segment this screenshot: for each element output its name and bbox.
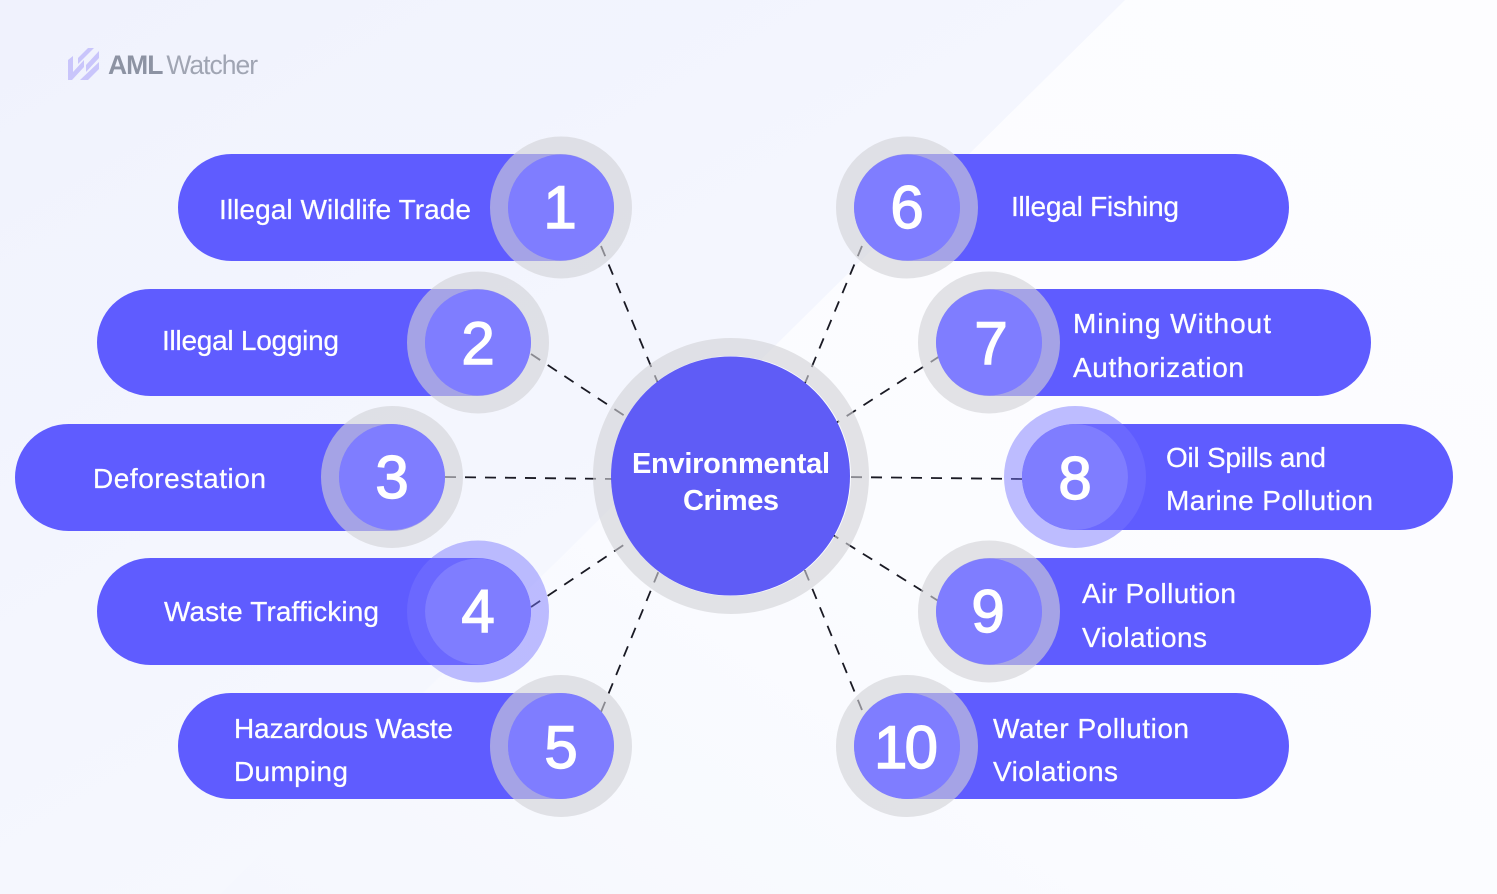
item 10: Water Pollution Violations: Water Pollution (993, 713, 1189, 744)
item 8: Oil Spills and Marine Pollution: Marine Pollution (1166, 485, 1373, 516)
item 2: Illegal Logging: Illegal Logging (162, 325, 339, 356)
item 6: Illegal Fishing (845, 146, 1289, 270)
item 8: Oil Spills and Marine Pollution (1013, 415, 1453, 539)
item 6: Illegal Fishing: 6 (890, 174, 924, 241)
item 10: Water Pollution Violations (845, 684, 1289, 808)
item 8: Oil Spills and Marine Pollution: Oil Spills and (1166, 442, 1326, 473)
item 10: Water Pollution Violations: 10 (874, 714, 938, 781)
item 7: Mining Without Authorization: Authorization (1073, 352, 1244, 383)
item 1: Illegal Wildlife Trade: 1 (543, 174, 577, 241)
central hub: Environmental Crimes: Environmental (632, 448, 830, 480)
item 3: Deforestation: 3 (375, 444, 409, 511)
item 4: Waste Trafficking: Waste Trafficking (164, 596, 379, 627)
item 9: Air Pollution Violations: 9 (971, 578, 1005, 645)
icon: logo mark (68, 48, 99, 80)
item 5: Hazardous Waste Dumping: Dumping (234, 756, 348, 787)
item 7: Mining Without Authorization: Mining Without (1073, 308, 1271, 339)
item 7: Mining Without Authorization (927, 280, 1371, 404)
item 1: Illegal Wildlife Trade: Illegal Wildlife Trade (219, 194, 471, 225)
item 7: Mining Without Authorization: 7 (974, 310, 1008, 377)
item 9: Air Pollution Violations: Violations (1082, 622, 1207, 653)
item 9: Air Pollution Violations (927, 550, 1371, 674)
item 3: Deforestation (15, 415, 454, 539)
item 2: Illegal Logging: 2 (461, 310, 495, 377)
item 10: Water Pollution Violations: Violations (993, 756, 1118, 787)
logo wordmark: AMLWatcher (108, 50, 258, 80)
item 6: Illegal Fishing: Illegal Fishing (1011, 191, 1179, 222)
item 5: Hazardous Waste Dumping: 5 (544, 714, 578, 781)
central hub: Environmental Crimes (602, 347, 860, 605)
item 1: Illegal Wildlife Trade (178, 146, 623, 270)
logo (68, 48, 258, 80)
item 2: Illegal Logging (97, 280, 540, 404)
item 9: Air Pollution Violations: Air Pollution (1082, 578, 1236, 609)
connector lines (445, 246, 1022, 712)
item 4: Waste Trafficking: 4 (461, 578, 495, 645)
item 5: Hazardous Waste Dumping: Hazardous Waste (234, 713, 453, 744)
central hub: Environmental Crimes: Crimes (683, 485, 779, 517)
item 3: Deforestation: Deforestation (93, 463, 266, 494)
item 5: Hazardous Waste Dumping (178, 684, 623, 808)
item 8: Oil Spills and Marine Pollution: 8 (1058, 445, 1092, 512)
item 4: Waste Trafficking (97, 550, 540, 674)
